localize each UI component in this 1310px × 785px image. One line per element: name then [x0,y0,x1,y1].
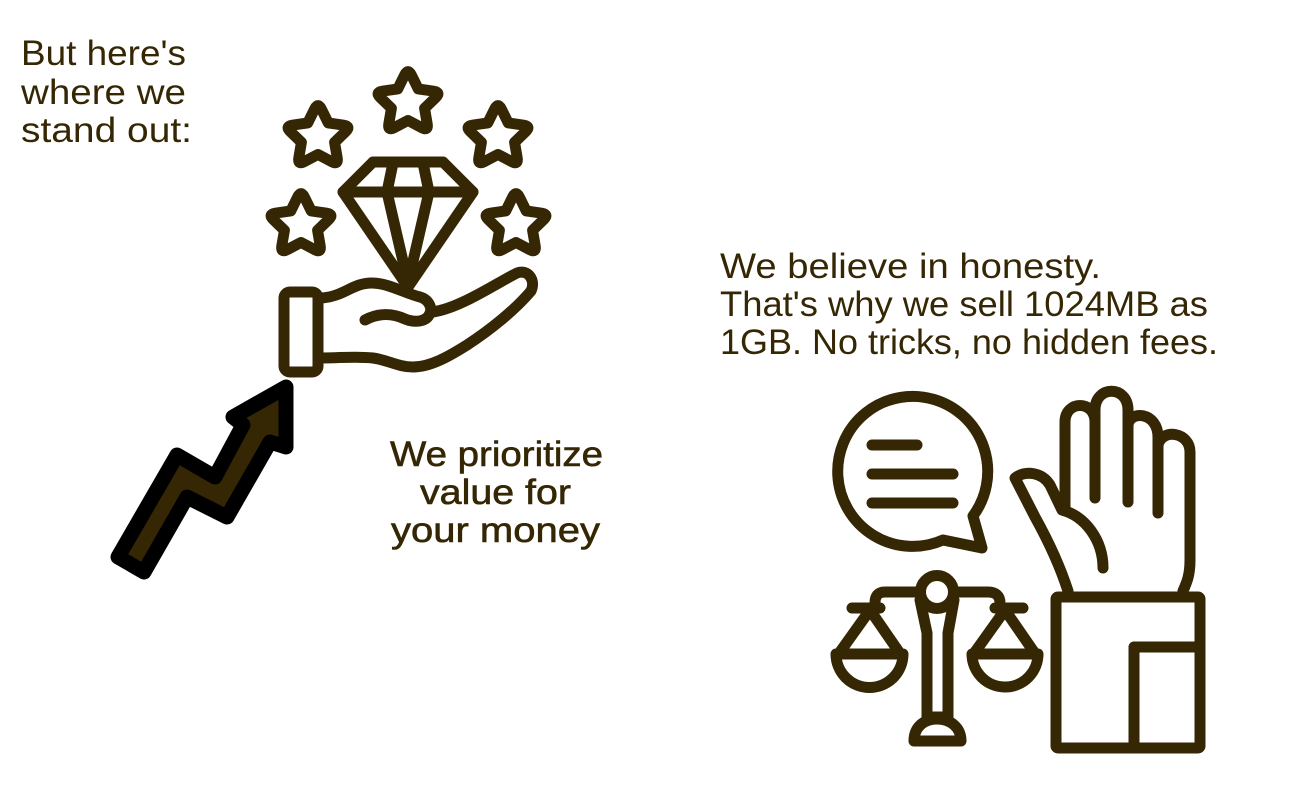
text: honesty statement: 1GB. No tricks, no hidden fees. [720,323,1218,362]
icon: speech bubble [838,396,988,548]
text: value for money: We prioritize [390,435,603,474]
icon: five stars [271,72,546,251]
icon: hand holding diamond with stars [271,72,546,372]
text: value for money [390,435,603,550]
text: value for money: value for [420,473,571,512]
icon: balance scales [836,576,1038,741]
text: honesty statement: We believe in honesty. [720,247,1101,286]
text: value for money: your money [391,511,601,550]
heading: where we stand out: stand out: [21,111,192,150]
icon: diamond [343,162,473,287]
icon: shirt cuff [1056,597,1200,748]
icon: open hand and cuff [284,272,533,372]
heading: where we stand out: where we [20,73,186,112]
text: honesty statement [720,247,1218,362]
arrow: rising zigzag [118,387,286,572]
heading: where we stand out: But here's [21,34,186,73]
text: honesty statement: That's why we sell 1024MB as [720,285,1208,324]
icon: honesty group [836,391,1200,748]
icon: raised hand [1015,391,1190,591]
heading: where we stand out [20,34,192,150]
